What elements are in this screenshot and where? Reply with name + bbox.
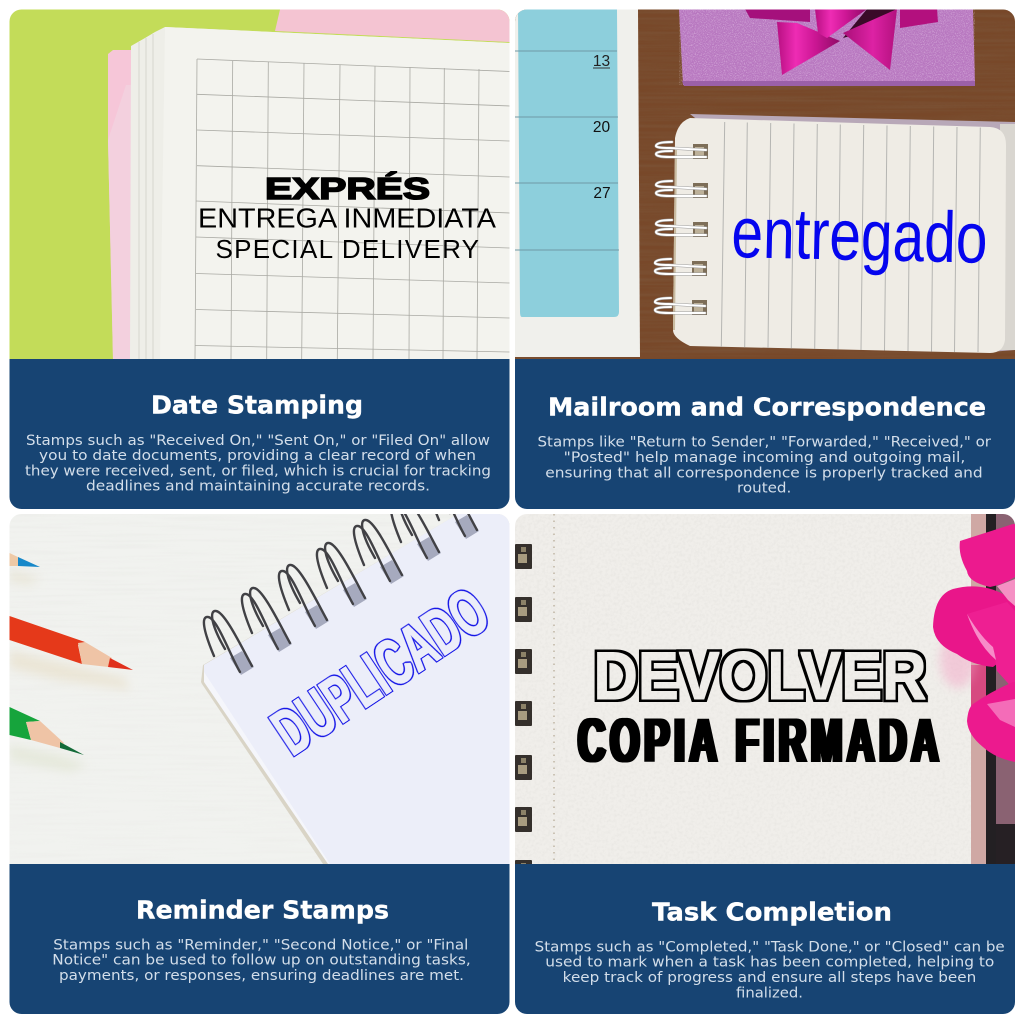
pencil: blue <box>10 553 40 567</box>
description: routed. <box>737 481 791 497</box>
heading: Reminder Stamps <box>136 896 389 925</box>
description <box>52 937 471 984</box>
stamp text: entrega inmediata: ENTREGA INMEDIATA <box>198 202 496 234</box>
notebook edge strip <box>971 514 1015 864</box>
description: Notice" can be used to follow up on outstanding tasks, <box>52 953 471 969</box>
panel: mailroom and correspondence <box>515 9 1015 509</box>
description <box>535 939 1005 1001</box>
photo: textured notebook page with pink flowers <box>515 514 1015 885</box>
description: Stamps like "Return to Sender," "Forwarded," "Received," or <box>538 434 991 450</box>
description: used to mark when a task has been completed, helping to <box>545 955 994 971</box>
gift box with bow <box>679 9 975 86</box>
calendar <box>515 10 640 357</box>
description: "Posted" help manage incoming and outgoing mail, <box>564 450 965 466</box>
description: ensuring that all correspondence is properly tracked and <box>545 465 983 481</box>
pink flower <box>933 524 1015 762</box>
photo: spiral notepad and coloured pencils <box>10 514 510 864</box>
description: payments, or responses, ensuring deadlines are met. <box>59 968 464 984</box>
stamp text: duplicado: DUPLICADO <box>259 573 501 769</box>
description: Stamps such as "Reminder," "Second Notice," or "Final <box>53 937 468 953</box>
pencil: green <box>10 707 84 755</box>
description <box>538 434 991 497</box>
pencil: red <box>10 616 133 670</box>
heading: Date Stamping <box>151 390 363 420</box>
photo: notebook, calendar and gift on wood desk <box>515 9 1015 360</box>
photo: grid notebook on green and pink background <box>10 10 510 360</box>
stamp text: expres: EXPRÉS <box>265 171 430 206</box>
description <box>25 433 491 494</box>
spiral notebook <box>655 114 1015 353</box>
description: keep track of progress and ensure all steps have been <box>563 970 976 986</box>
stamp text: special delivery: SPECIAL DELIVERY <box>216 234 479 264</box>
caption card: date stamping <box>10 359 510 509</box>
panel: task completion <box>515 514 1015 1014</box>
stamp text: copia firmada: COPIA FIRMADA <box>578 706 943 777</box>
caption card: reminder <box>10 864 510 1014</box>
binding holes <box>515 544 532 885</box>
calendar: 27 <box>593 185 611 202</box>
pencil shadows <box>10 570 130 772</box>
description: Stamps such as "Received On," "Sent On," or "Filed On" allow <box>26 433 490 449</box>
description: Stamps such as "Completed," "Task Done," or "Closed" can be <box>535 939 1005 955</box>
description: you to date documents, providing a clear record of when <box>39 448 476 464</box>
stamp text: devolver: DEVOLVER <box>594 638 926 714</box>
panel: reminder stamps <box>10 475 515 1014</box>
description: deadlines and maintaining accurate records. <box>86 478 430 494</box>
notepad <box>201 514 510 864</box>
heading: Mailroom and Correspondence <box>548 392 986 422</box>
calendar: 20 <box>593 119 610 136</box>
description: finalized. <box>736 985 803 1001</box>
calendar: 13 <box>593 53 610 70</box>
caption card: task completion <box>515 864 1015 1014</box>
description: they were received, sent, or filed, which is crucial for tracking <box>25 464 491 480</box>
heading: Task Completion <box>652 898 892 927</box>
panel: date stamping <box>10 10 510 509</box>
caption card: mailroom <box>515 359 1015 509</box>
